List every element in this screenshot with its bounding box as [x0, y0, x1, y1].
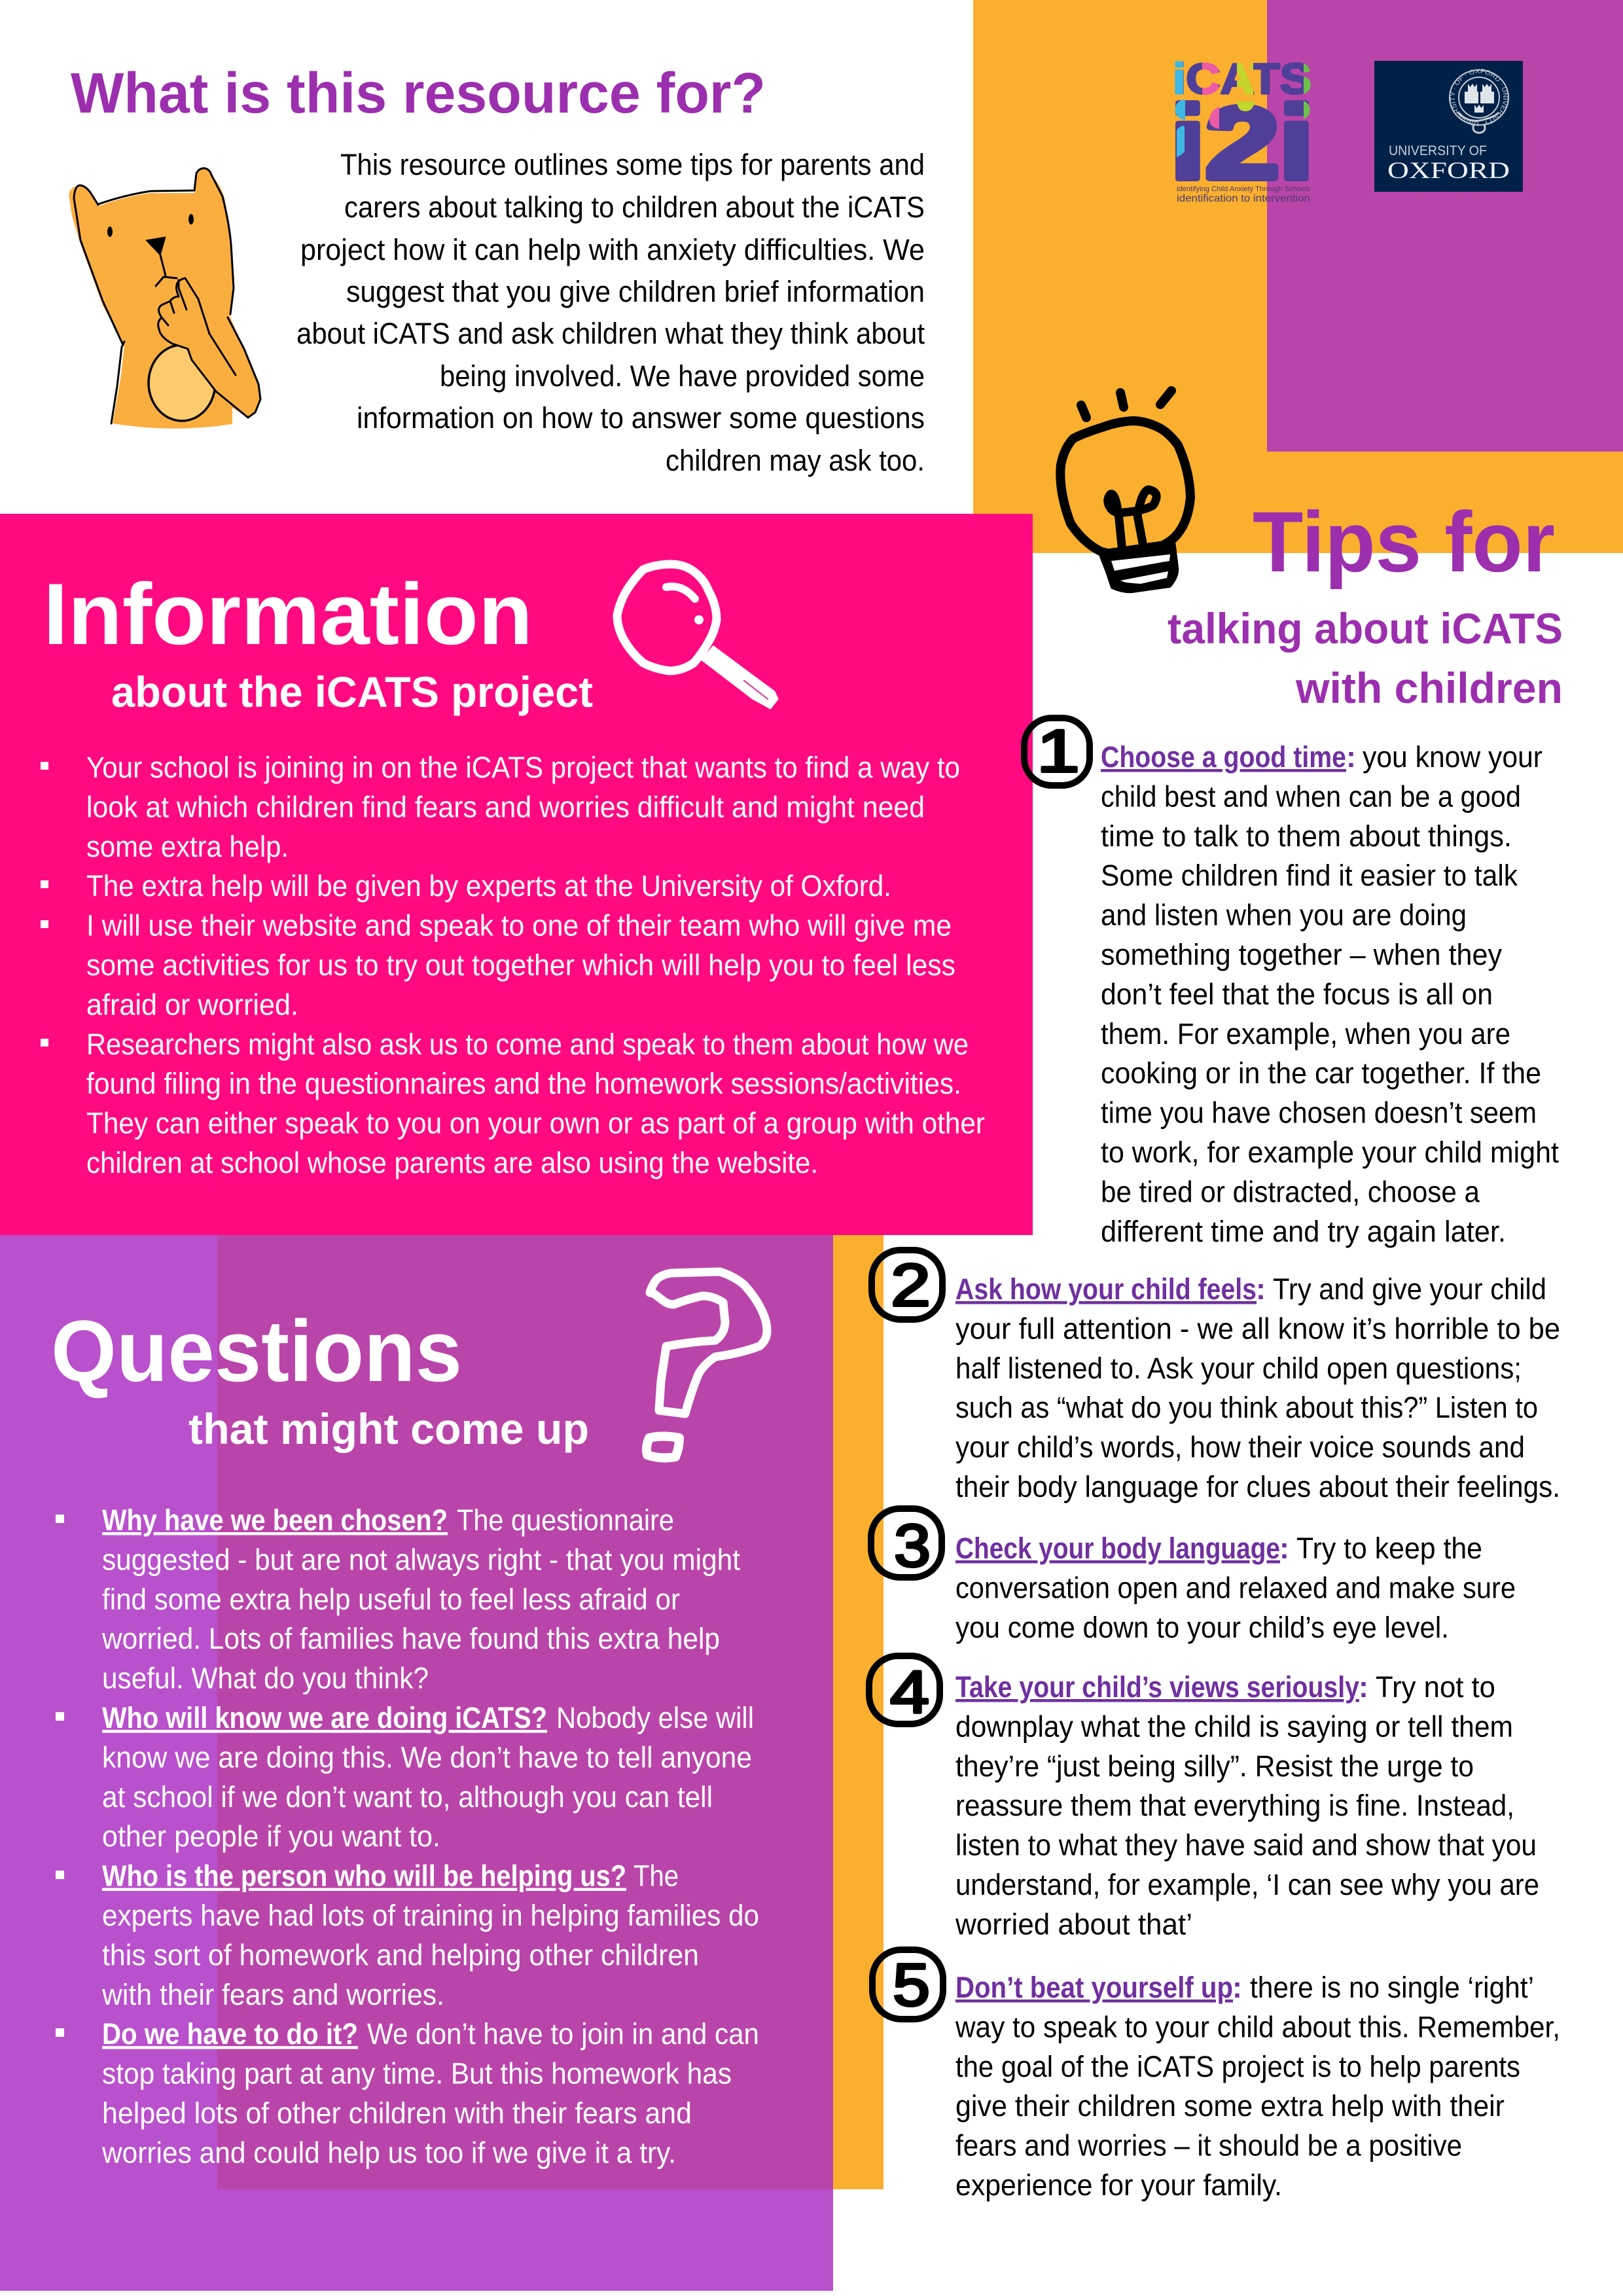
tip 3: check your body language: : [1279, 1532, 1289, 1565]
text block: question bullets: The questionnaire [457, 1503, 674, 1537]
panel: purple corner block [1267, 0, 1623, 452]
tip 3: check your body language: conversation open and relaxed and make sure [955, 1571, 1516, 1604]
tip 1: choose a good time: different time and try again later. [1101, 1215, 1506, 1248]
logo: University of Oxford: UNIVERSITY · OF · OXFORD · UNIVERSITY [1450, 69, 1508, 126]
text block: information bullets: afraid or worried. [86, 988, 298, 1021]
tip 1: choose a good time: : [1346, 740, 1356, 774]
tip 5: don't beat yourself up: give their children some extra help with their [955, 2089, 1505, 2123]
tip 1: choose a good time: don’t feel that the focus is all on [1101, 977, 1493, 1011]
icon: question mark [647, 1272, 767, 1458]
tip 4: take your child's views seriously: : [1359, 1670, 1368, 1704]
tip 1: choose a good time: time you have chosen doesn’t seem [1101, 1096, 1537, 1130]
tip 4: take your child's views seriously: reassure them that everything is fine. Instead, [955, 1789, 1514, 1822]
heading: information: Information [43, 566, 533, 663]
text block: question bullets: Who will know we are doing iCATS? [102, 1701, 547, 1734]
tip 5: don't beat yourself up: experience for your family. [955, 2168, 1282, 2202]
icon: light bulb [1060, 391, 1190, 591]
tip 5: don't beat yourself up: there is no single ‘right’ [1250, 1971, 1534, 2004]
tip 5: don't beat yourself up: the goal of the iCATS project is to help parents [955, 2050, 1520, 2083]
text block: question bullets: experts have had lots of training in helping families do [102, 1899, 759, 1932]
text block: information bullets: some activities for us to try out together which will help you to feel less [86, 948, 955, 982]
text block: question bullets: suggested - but are not always right - that you might [102, 1543, 740, 1576]
text block: question bullets: We don’t have to join in and can [367, 2017, 759, 2051]
text block: resource intro: suggest that you give children brief information [346, 275, 925, 308]
tip 4: take your child's views seriously: Try not to [1376, 1670, 1495, 1704]
tip 5: don't beat yourself up: : [1232, 1971, 1242, 2004]
logo: iCATS i2i: 2 [1205, 86, 1279, 200]
tip 2: ask how your child feels: your full attention - we all know it’s horrible to be [955, 1312, 1560, 1345]
tip 2: ask how your child feels: Ask how your child feels [955, 1272, 1257, 1306]
text block: information bullets: some extra help. [86, 830, 289, 863]
panel: questions darker overlay [217, 1234, 833, 2189]
heading: what is this resource for: What is this resource for? [71, 62, 766, 125]
text block: question bullets: stop taking part at any time. But this homework has [102, 2057, 732, 2090]
icon: number 5 [872, 1950, 943, 2019]
tip 5: don't beat yourself up [955, 1971, 1560, 2202]
tip 4: take your child's views seriously [955, 1670, 1539, 1941]
panel: questions background [0, 1234, 833, 2291]
panel: orange vertical strip [833, 1234, 883, 2189]
text block: resource intro: being involved. We have provided some [440, 359, 925, 393]
tip 2: ask how your child feels: Try and give your child [1273, 1272, 1546, 1306]
text block: question bullets: worries and could help us too if we give it a try. [101, 2136, 676, 2169]
icon: thinking cat [69, 168, 260, 429]
tip 4: take your child's views seriously: listen to what they have said and show that you [955, 1829, 1537, 1862]
text block: question bullets: this sort of homework and helping other children [102, 1938, 699, 1971]
logo: iCATS i2i: identifying Child Anxiety Through Schools [1177, 185, 1310, 193]
text block: resource intro: about iCATS and ask children what they think about [296, 317, 925, 350]
tip 1: choose a good time: be tired or distracted, choose a [1101, 1175, 1480, 1208]
tip 3: check your body language: Check your body language [955, 1532, 1280, 1565]
icon: number 5: 5 [893, 1952, 930, 2018]
tip 3: check your body language: Try to keep the [1296, 1532, 1482, 1565]
subheading: about the iCATS project: about the iCATS project [111, 668, 593, 716]
subheading: talking about iCATS with children: with children [1295, 664, 1563, 712]
icon: number 1: 1 [1037, 718, 1080, 785]
icon: number 1 [1024, 718, 1090, 785]
text block: resource intro: This resource outlines some tips for parents and [340, 148, 925, 181]
text block: resource intro: children may ask too. [666, 444, 925, 477]
tip 1: choose a good time: to work, for example your child might [1101, 1136, 1559, 1169]
heading: questions: Questions [51, 1303, 462, 1400]
tip 5: don't beat yourself up: fears and worries – it should be a positive [955, 2129, 1462, 2162]
text block: question bullets: worried. Lots of families have found this extra help [101, 1622, 720, 1655]
text block: information bullets: Researchers might also ask us to come and speak to them about how we [86, 1028, 969, 1061]
tip 4: take your child's views seriously: understand, for example, ‘I can see why you are [955, 1868, 1539, 1901]
text block: question bullets: useful. What do you think? [102, 1662, 429, 1695]
text block: information bullets: They can either speak to you on your own or as part of a group with other [86, 1107, 985, 1140]
tip 1: choose a good time: Some children find it easier to talk [1101, 859, 1518, 892]
tip 4: take your child's views seriously: downplay what the child is saying or tell them [955, 1710, 1513, 1743]
icon: number 4: 4 [890, 1659, 929, 1726]
text block: resource intro: information on how to answer some questions [357, 401, 925, 435]
logo: iCATS i2i: i [1169, 84, 1206, 201]
tip 2: ask how your child feels: : [1256, 1272, 1266, 1306]
tip 4: take your child's views seriously: Take your child’s views seriously [955, 1670, 1359, 1704]
icon: number 3: 3 [894, 1513, 931, 1579]
text block: information bullets: Your school is joining in on the iCATS project that wants to find a way to [86, 751, 960, 784]
tip 2: ask how your child feels: your child’s words, how their voice sounds and [955, 1431, 1525, 1464]
icon: number 4 [869, 1656, 940, 1726]
tip 1: choose a good time: them. For example, when you are [1101, 1017, 1510, 1050]
text block: question bullets: other people if you want to. [102, 1820, 440, 1853]
logo: iCATS i2i: identification to intervention [1177, 193, 1310, 204]
tip 1: choose a good time: cooking or in the car together. If the [1101, 1056, 1541, 1090]
logo: iCATS i2i: i [1278, 84, 1315, 201]
tip 1: choose a good time: Choose a good time [1101, 740, 1346, 774]
text block: information bullets: found filing in the questionnaires and the homework sessions/activities. [86, 1067, 961, 1100]
tip 4: take your child's views seriously: worried about that’ [955, 1907, 1192, 1941]
text block: resource intro [296, 148, 925, 477]
text block: information bullets [41, 751, 985, 1179]
tip 1: choose a good time [1101, 740, 1559, 1248]
tip 5: don't beat yourself up: way to speak to your child about this. Remember, [955, 2010, 1560, 2043]
text block: question bullets: Do we have to do it? [102, 2017, 358, 2051]
text block: question bullets: Nobody else will [556, 1701, 754, 1734]
heading: tips for: Tips for [1253, 493, 1555, 590]
text block: question bullets: with their fears and worries. [101, 1978, 444, 2011]
logo: iCATS i2i: iCATS [1173, 54, 1311, 103]
text block: resource intro: project how it can help with anxiety difficulties. We [300, 233, 925, 266]
text block: question bullets: know we are doing this. We don’t have to tell anyone [102, 1740, 752, 1774]
tip 1: choose a good time: you know your [1363, 740, 1543, 774]
subheading: talking about iCATS with children [1168, 604, 1563, 712]
tip 1: choose a good time: something together – when they [1101, 938, 1502, 971]
tip 2: ask how your child feels: half listened to. Ask your child open questions; [955, 1352, 1522, 1385]
text block: information bullets: I will use their website and speak to one of their team who will give me [86, 909, 952, 942]
logo: University of Oxford: UNIVERSITY OF [1389, 143, 1487, 158]
logo: iCATS i2i [1169, 54, 1315, 204]
subheading: that might come up: that might come up [188, 1405, 589, 1453]
icon: number 3 [871, 1509, 942, 1579]
panel: information background [0, 514, 1033, 1235]
tip 2: ask how your child feels: such as “what do you think about this?” Listen to [955, 1391, 1538, 1424]
text block: question bullets: Who is the person who will be helping us? [102, 1859, 626, 1893]
tip 5: don't beat yourself up: Don’t beat yourself up [955, 1971, 1233, 2004]
tip 1: choose a good time: time to talk to them about things. [1101, 819, 1512, 853]
panel: orange corner block [973, 0, 1623, 553]
text block: information bullets: The extra help will be given by experts at the University of Oxford. [86, 869, 891, 903]
tip 2: ask how your child feels [955, 1272, 1560, 1503]
tip 1: choose a good time: and listen when you are doing [1101, 899, 1467, 932]
text block: question bullets: Why have we been chosen? [102, 1503, 448, 1537]
logo: University of Oxford: OXFORD [1387, 157, 1510, 183]
icon: magnifying glass [617, 564, 777, 708]
text block: question bullets: The [633, 1859, 679, 1893]
tip 2: ask how your child feels: their body language for clues about their feelings. [955, 1470, 1560, 1503]
tip 3: check your body language: you come down to your child’s eye level. [955, 1611, 1449, 1644]
tip 4: take your child's views seriously: they’re “just being silly”. Resist the urge to [955, 1749, 1474, 1783]
tip 3: check your body language [955, 1532, 1516, 1644]
text block: information bullets: look at which children find fears and worries difficult and might need [86, 790, 925, 823]
logo: University of Oxford [1374, 61, 1523, 192]
icon: number 2: 2 [891, 1252, 931, 1319]
text block: information bullets: children at school whose parents are also using the website. [86, 1146, 818, 1179]
text block: question bullets: helped lots of other children with their fears and [102, 2096, 692, 2130]
subheading: talking about iCATS with children: talking about iCATS [1168, 604, 1563, 653]
text block: question bullets: find some extra help useful to feel less afraid or [102, 1583, 680, 1616]
text block: question bullets [56, 1503, 759, 2169]
text block: question bullets: at school if we don’t want to, although you can tell [102, 1780, 713, 1814]
tip 1: choose a good time: child best and when can be a good [1101, 780, 1521, 813]
icon: number 2 [872, 1250, 942, 1319]
text block: resource intro: carers about talking to children about the iCATS [344, 190, 925, 224]
